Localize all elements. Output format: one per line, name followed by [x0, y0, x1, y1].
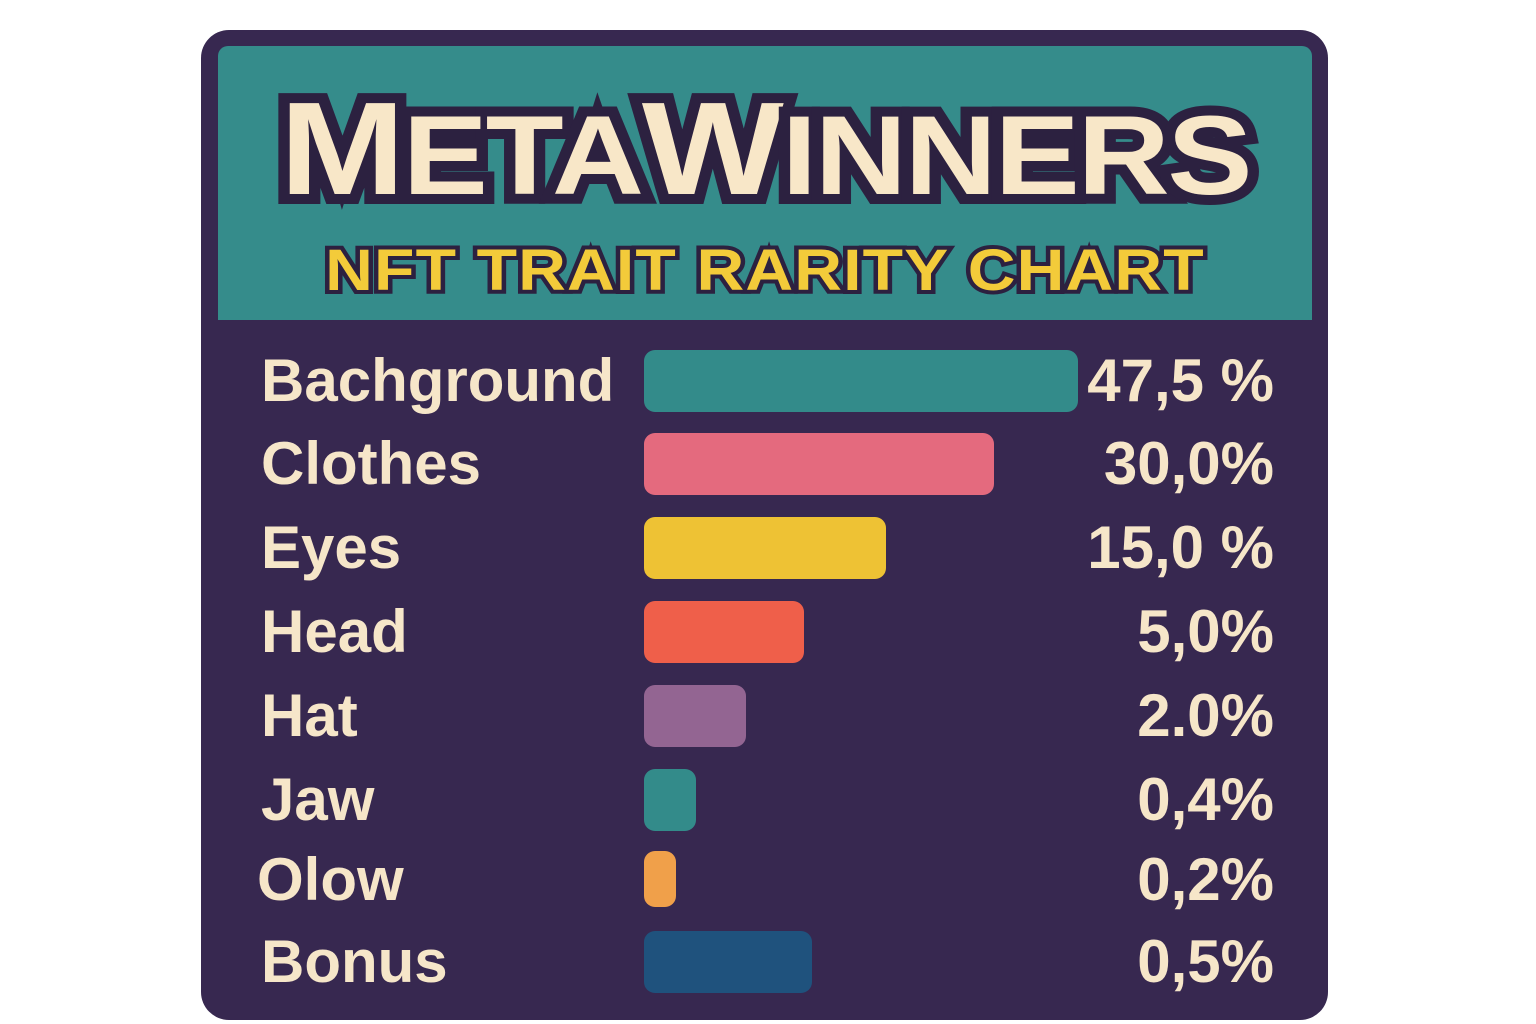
row: Eyes: 15,0 % — [1087, 514, 1274, 581]
header banner — [218, 46, 1312, 320]
row: Bonus: Bonus — [261, 928, 448, 995]
row: Jaw: Jaw — [261, 766, 374, 833]
title: METAWINNERS — [280, 75, 1250, 222]
panel: chart card — [201, 30, 1328, 1020]
row: Clothes — [261, 430, 1274, 497]
row: Hat: 2.0% — [1137, 682, 1274, 749]
row: Olow — [257, 846, 1274, 913]
row: Eyes — [261, 514, 1274, 581]
row: Olow: Olow — [257, 846, 404, 913]
row: Head — [261, 598, 1274, 665]
row: Bachground — [261, 347, 1274, 414]
row: Olow: 0,2% — [1137, 846, 1274, 913]
row: Head: 5,0% — [1137, 598, 1274, 665]
row: Clothes: 30,0% — [1104, 430, 1274, 497]
row: Bonus: 0,5% — [1137, 928, 1274, 995]
subtitle: NFT TRAIT RARITY CHART — [325, 238, 1205, 303]
row: Bachground: 47,5 % — [1087, 347, 1274, 414]
row: Hat — [261, 682, 1274, 749]
row: Eyes: Eyes — [261, 514, 401, 581]
row: Bonus — [261, 928, 1274, 995]
row: Hat: Hat — [261, 682, 358, 749]
row: Bachground: Bachground — [261, 347, 614, 414]
row: Clothes: Clothes — [261, 430, 481, 497]
row: Jaw — [261, 766, 1274, 833]
row: Head: Head — [261, 598, 408, 665]
row: Jaw: 0,4% — [1137, 766, 1274, 833]
